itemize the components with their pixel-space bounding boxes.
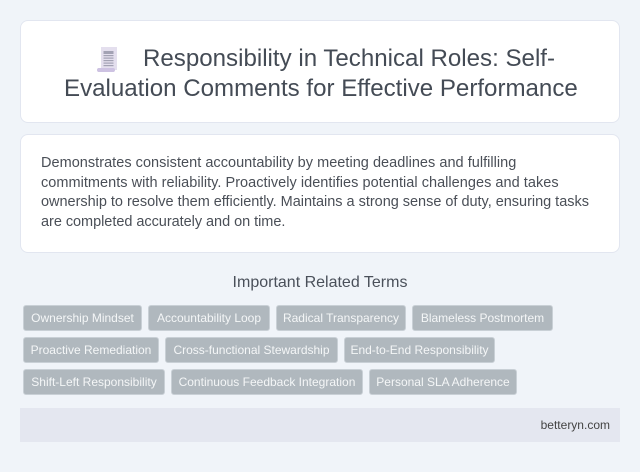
text block: summary paragraph	[41, 155, 589, 230]
chip: Personal SLA Adherence	[376, 375, 510, 389]
title: Evaluation Comments for Effective Performance	[64, 75, 578, 102]
chip	[148, 305, 270, 331]
chip	[23, 305, 142, 331]
text block: summary paragraph: commitments with reliability. Proactively identifies potential challenges and takes	[41, 174, 559, 190]
chip	[165, 337, 338, 363]
footer	[20, 408, 620, 442]
chip	[276, 305, 406, 331]
heading: related terms: Important Related Terms	[233, 274, 407, 291]
chip: Continuous Feedback Integration	[179, 375, 355, 389]
chip	[344, 337, 495, 363]
text block: summary paragraph: Demonstrates consistent accountability by meeting deadlines and fulfilling	[41, 155, 516, 171]
chip: Cross-functional Stewardship	[173, 343, 330, 357]
panel: summary card	[20, 134, 620, 253]
chip	[23, 369, 165, 395]
title	[64, 45, 578, 102]
chip	[412, 305, 553, 331]
chip group: related terms	[23, 305, 553, 395]
chip	[369, 369, 517, 395]
chip: Proactive Remediation	[31, 343, 151, 357]
icon: document scroll	[97, 47, 117, 72]
title: Responsibility in Technical Roles: Self-	[143, 45, 555, 72]
footer: betteryn.com	[541, 418, 610, 432]
chip: Ownership Mindset	[31, 311, 134, 325]
text block: summary paragraph: ownership to resolve them efficiently. Maintains a strong sense of duty, ensuring tasks	[41, 194, 589, 210]
chip: Blameless Postmortem	[421, 311, 544, 325]
chip	[23, 337, 159, 363]
panel: header card	[20, 20, 620, 123]
chip: Shift-Left Responsibility	[31, 375, 157, 389]
chip	[171, 369, 363, 395]
text block: summary paragraph: are completed accurately and on time.	[41, 214, 285, 230]
chip: Radical Transparency	[283, 311, 399, 325]
chip: End-to-End Responsibility	[350, 343, 489, 357]
chip: Accountability Loop	[157, 311, 261, 325]
